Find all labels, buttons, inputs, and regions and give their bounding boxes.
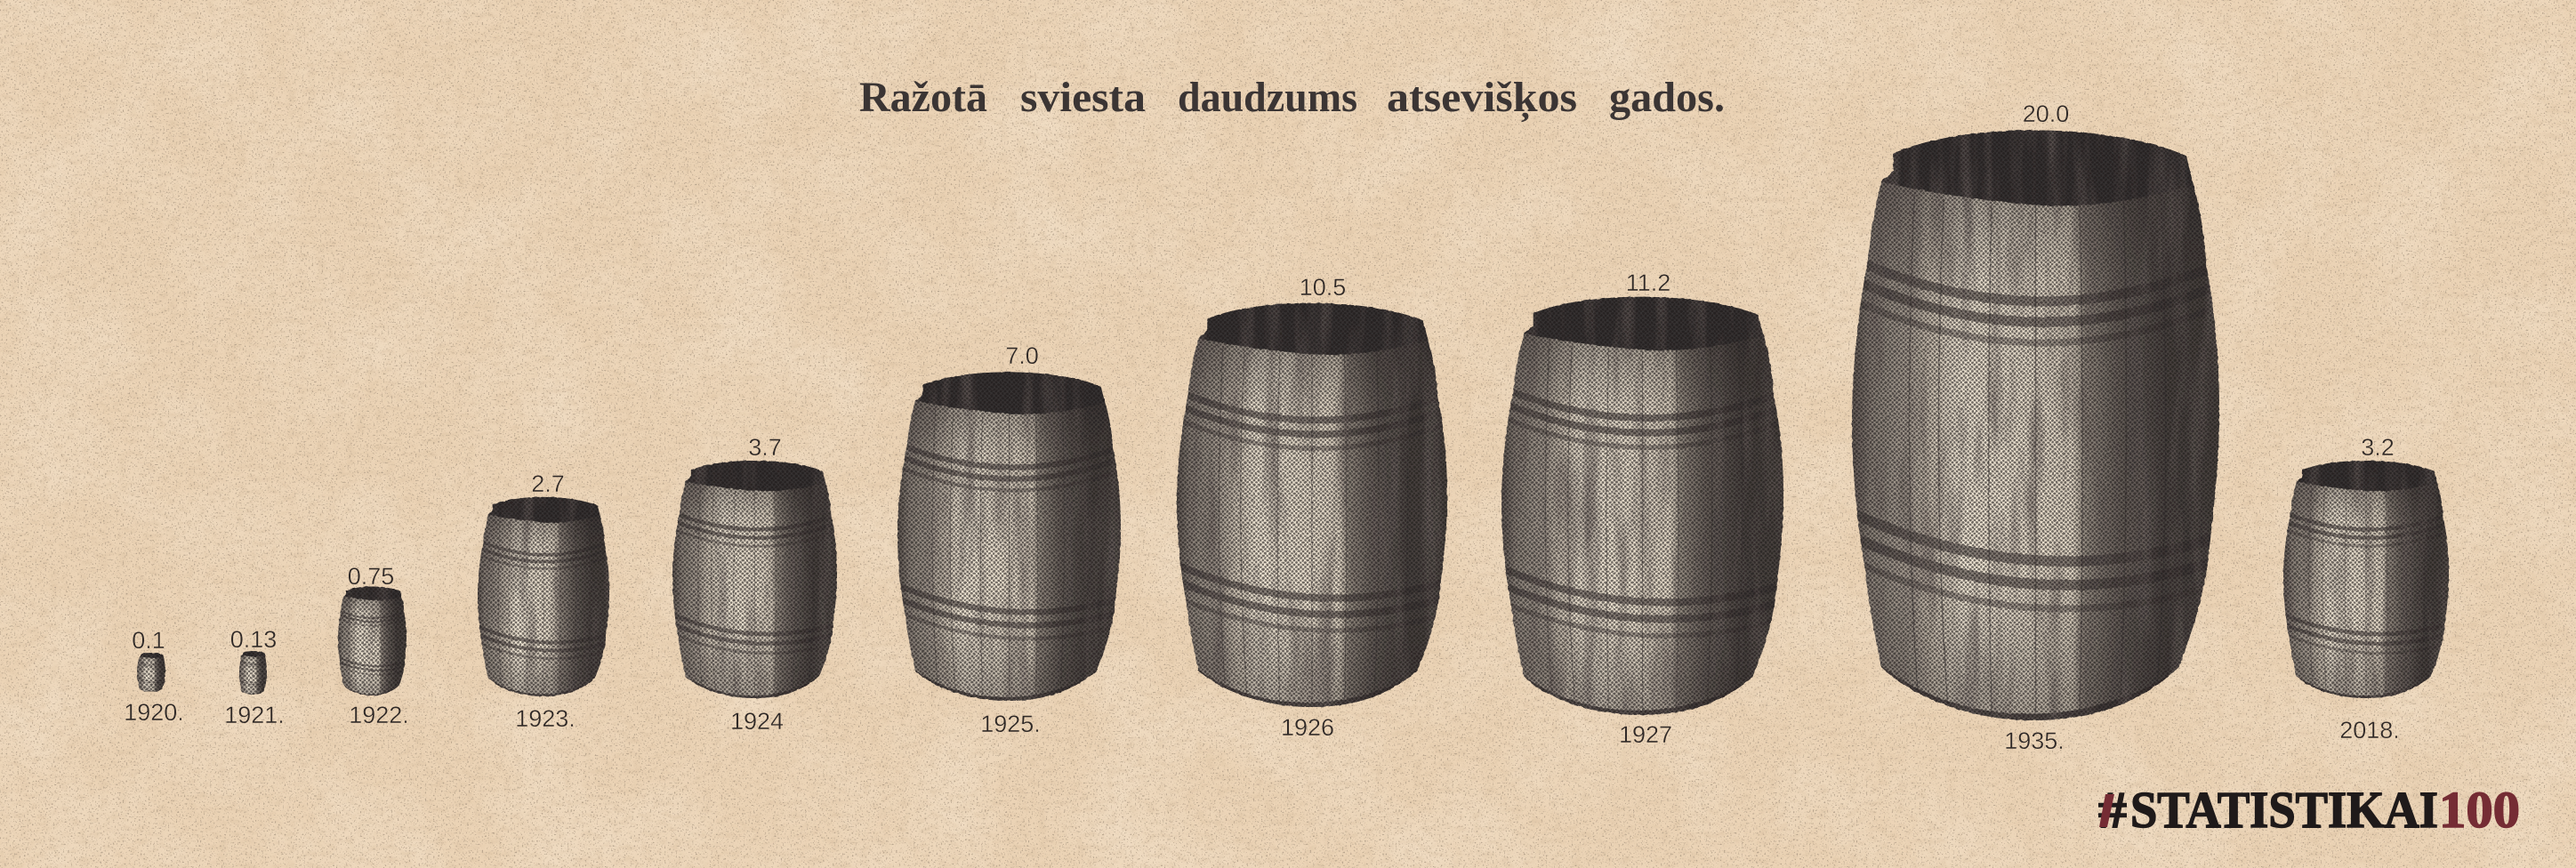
title: Ražotā <box>859 74 987 121</box>
year label 1921: 1921. <box>224 702 285 728</box>
icon: barrel 1920 <box>137 653 165 692</box>
icon: barrel 1922 <box>338 586 407 695</box>
year label 2018: 2018. <box>2339 717 2400 743</box>
barrel column: 1925 <box>898 342 1121 737</box>
icon: barrel 2018 <box>2283 460 2449 698</box>
year label 1926: 1926 <box>1281 714 1334 741</box>
year label 1925: 1925. <box>980 711 1041 737</box>
hashtag logo: STATISTIKAI <box>2130 781 2438 839</box>
icon: barrel 1927 <box>1501 295 1783 715</box>
icon: barrel 1924 <box>672 460 837 698</box>
hashtag logo: 100 <box>2439 781 2520 839</box>
year label 1923: 1923. <box>515 705 576 732</box>
barrel column: 1927 <box>1501 269 1783 748</box>
title: sviesta <box>1020 74 1146 121</box>
barrel column: 1922 <box>338 563 409 728</box>
icon: barrel 1921 <box>239 651 267 695</box>
barrel column: 1921 <box>226 631 283 724</box>
icon: barrel 1926 <box>1177 301 1447 707</box>
value label 2018: 3.2 <box>2361 434 2395 461</box>
value label 1923: 2.7 <box>531 470 565 497</box>
year label 1920: 1920. <box>124 699 184 726</box>
value label 1921: 0.13 <box>230 626 277 653</box>
value label 1920: 0.1 <box>132 627 165 654</box>
title: atsevišķos <box>1387 74 1577 123</box>
year label 1927: 1927 <box>1619 721 1672 748</box>
year label 1922: 1922. <box>349 702 409 728</box>
title: gados. <box>1609 74 1725 121</box>
value label 1924: 3.7 <box>748 434 782 461</box>
icon: barrel 1935 <box>1852 128 2219 720</box>
barrel column: 1923 <box>478 470 609 732</box>
value label 1935: 20.0 <box>2023 100 2069 127</box>
year label 1935: 1935. <box>2004 727 2065 754</box>
barrel column: 1920 <box>125 631 181 720</box>
value label 1927: 11.2 <box>1626 269 1670 296</box>
hashtag logo: # <box>2098 781 2127 839</box>
barrel column: 1935 <box>1852 100 2219 754</box>
value label 1922: 0.75 <box>348 563 394 590</box>
value label 1926: 10.5 <box>1300 274 1346 301</box>
value label 1925: 7.0 <box>1005 342 1039 369</box>
barrel column: 1926 <box>1177 274 1447 741</box>
title: daudzums <box>1178 74 1357 121</box>
icon: barrel 1925 <box>898 371 1121 701</box>
year label 1924: 1924 <box>730 708 784 735</box>
icon: barrel 1923 <box>478 496 609 696</box>
barrel column: 1924 <box>672 434 837 735</box>
barrel column: 2018 <box>2283 434 2449 743</box>
